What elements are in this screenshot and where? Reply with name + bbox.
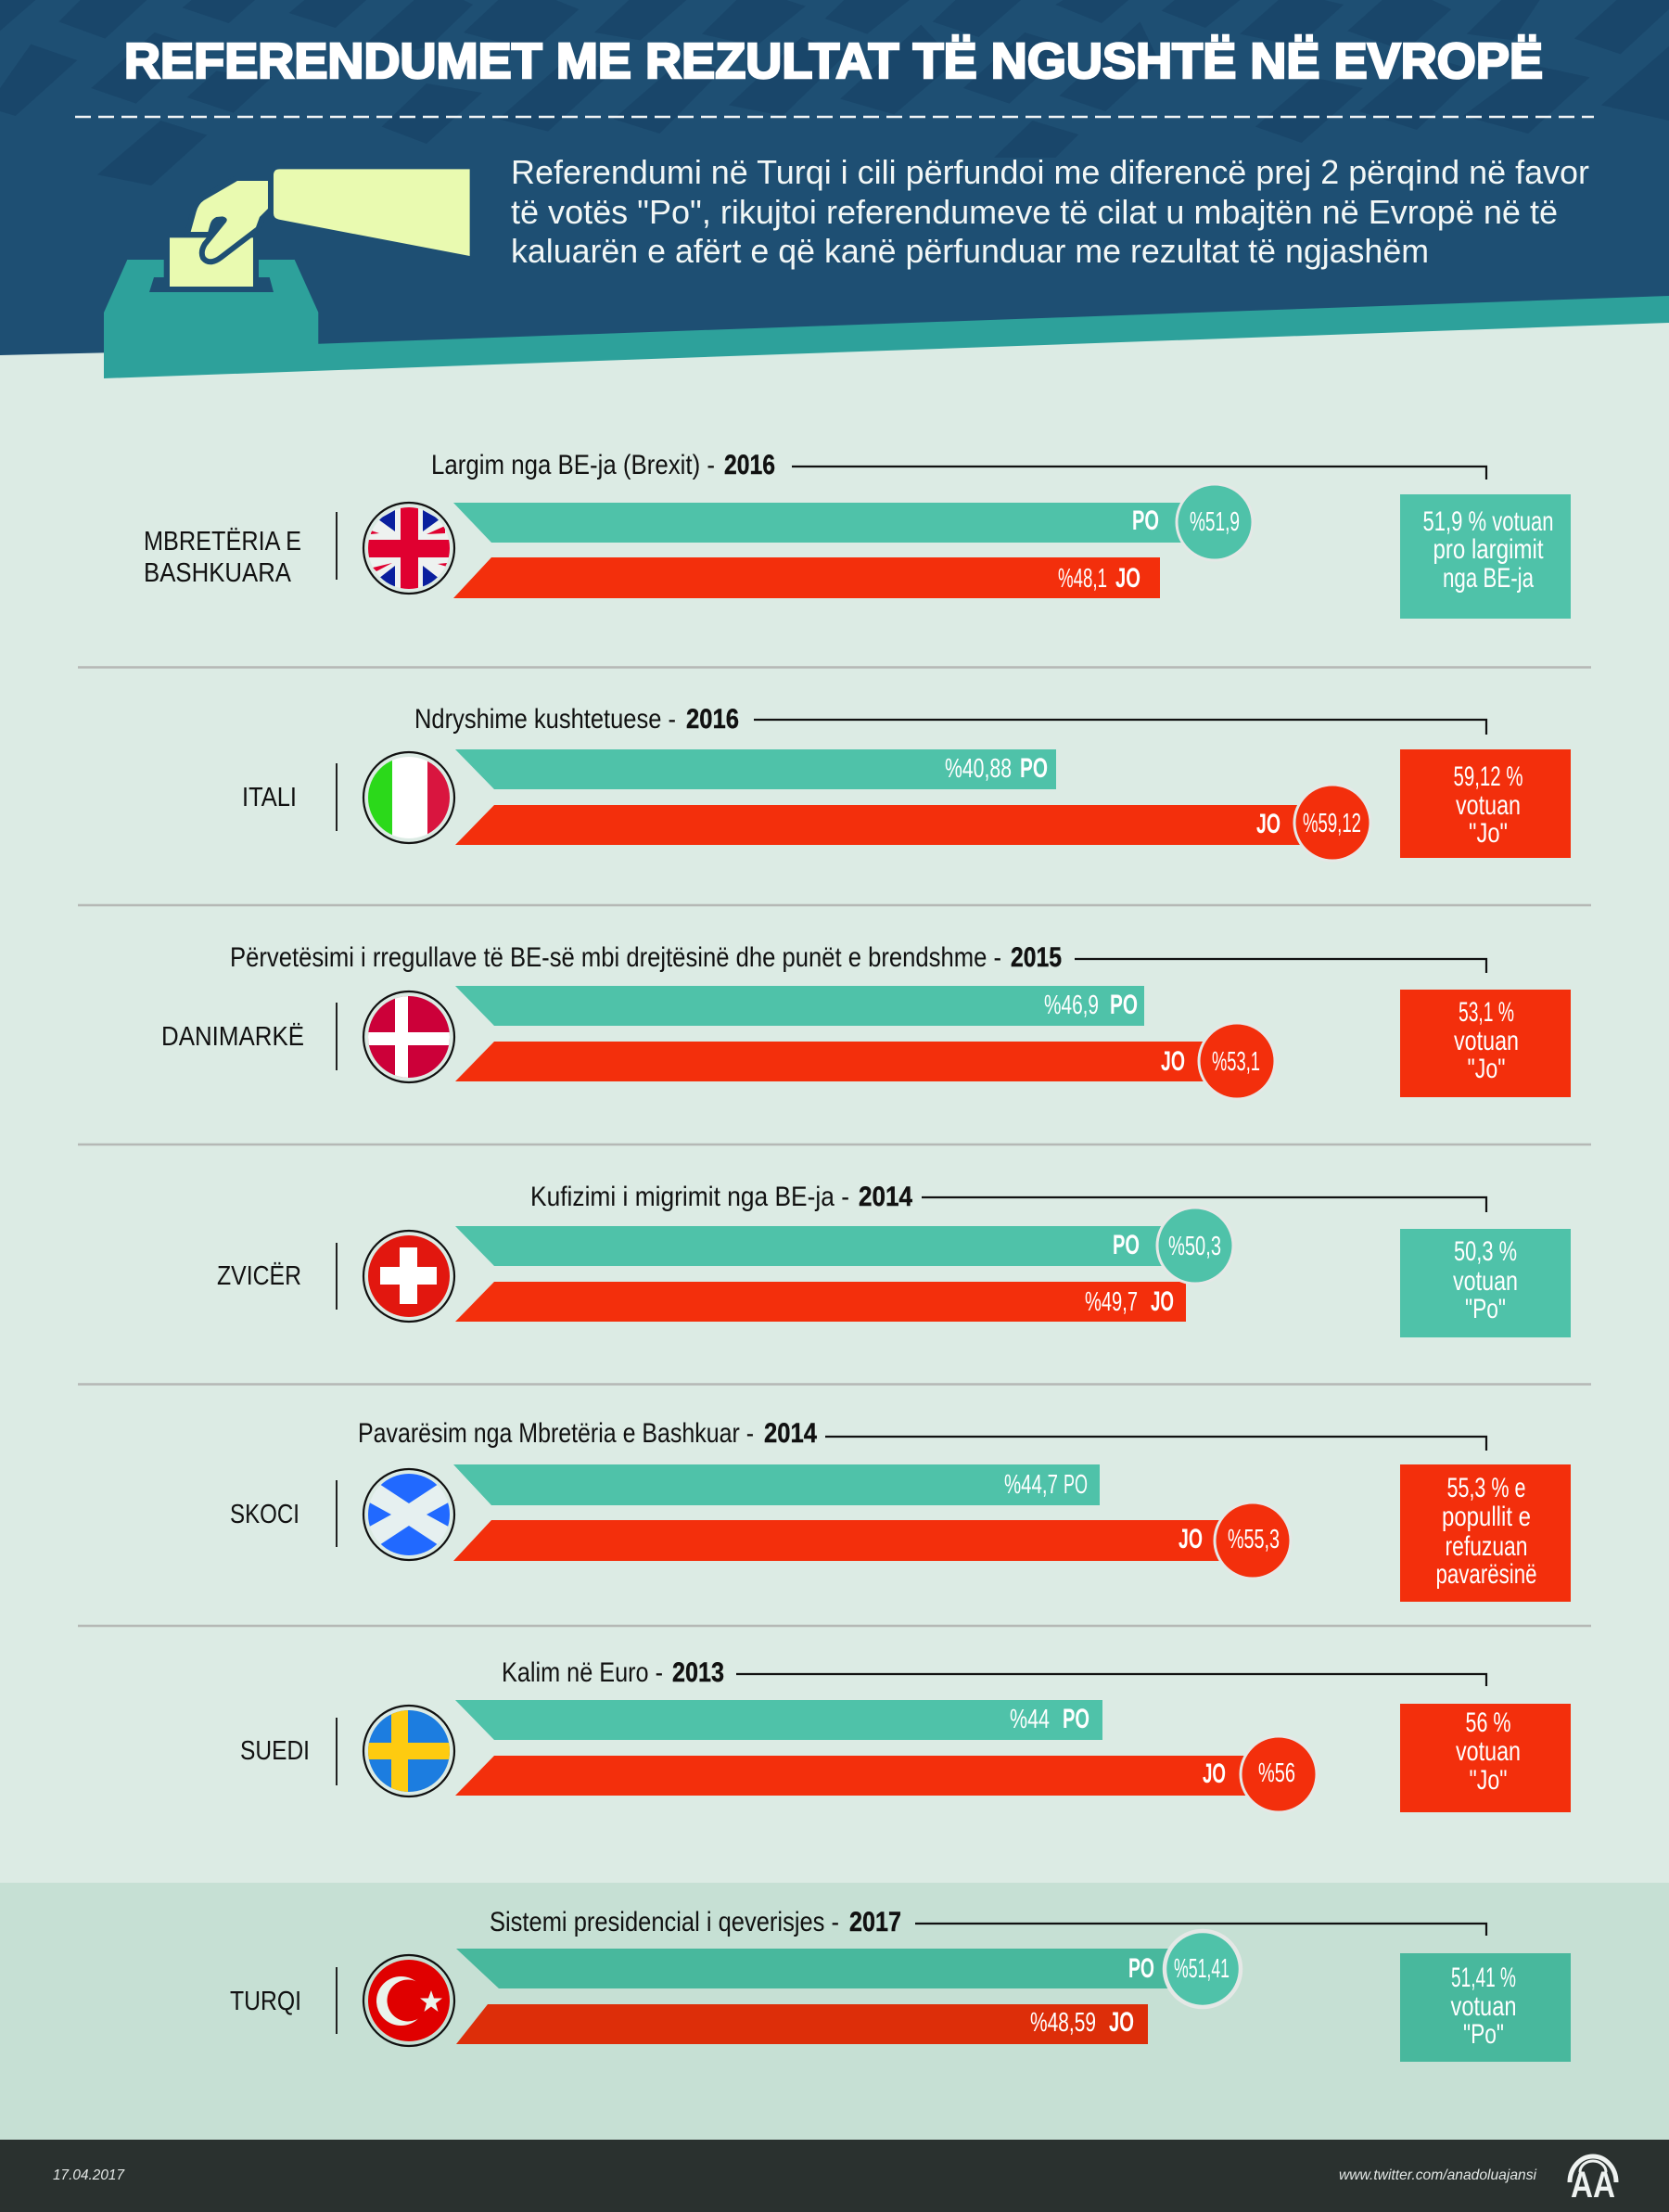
panel: Sweden xyxy=(240,1657,1571,1812)
bar labels: %55,3 xyxy=(1228,1525,1280,1554)
result box xyxy=(1400,1464,1571,1602)
bar labels: PO xyxy=(1064,1470,1088,1500)
bubble: winning share xyxy=(1177,484,1253,560)
result box: votuan xyxy=(1456,790,1521,821)
icon: Anadolu Agency logo: AA xyxy=(1571,2165,1615,2206)
panel: Denmark xyxy=(161,942,1571,1099)
result box: nga BE-ja xyxy=(1443,563,1534,594)
referendum heading: Largim nga BE-ja (Brexit) - xyxy=(431,450,715,480)
bar labels: %59,12 xyxy=(1303,809,1361,838)
bar labels: %56 xyxy=(1258,1758,1295,1788)
result box: "Jo" xyxy=(1467,1054,1506,1084)
referendum heading: Sistemi presidencial i qeverisjes - xyxy=(490,1907,839,1937)
country name: SKOCI xyxy=(230,1500,299,1529)
bar labels: JO xyxy=(1178,1524,1203,1554)
bar labels xyxy=(1030,1953,1229,2038)
date: 17.04.2017 xyxy=(53,2167,125,2183)
panel: header background xyxy=(0,0,1669,355)
bar labels: %50,3 xyxy=(1168,1232,1221,1261)
country name: TURQI xyxy=(230,1987,301,2016)
bar labels: JO xyxy=(1203,1758,1226,1789)
bar: PO xyxy=(456,1949,1203,1988)
result box: 56 % xyxy=(1465,1707,1511,1738)
bar: JO xyxy=(453,1520,1253,1561)
result box: 50,3 % xyxy=(1454,1236,1517,1267)
referendum heading: 2016 xyxy=(686,704,739,735)
result box: 51,9 % votuan xyxy=(1422,506,1554,537)
referendum heading: Ndryshime kushtetuese - xyxy=(414,704,676,735)
bar: PO xyxy=(453,1464,1100,1505)
result box: popullit e xyxy=(1442,1502,1531,1532)
bar: PO xyxy=(455,749,1056,789)
result box: "Po" xyxy=(1463,2019,1504,2050)
result box: votuan xyxy=(1454,1026,1519,1056)
result box xyxy=(1400,1953,1571,2062)
bar labels: %46,9 xyxy=(1044,991,1099,1020)
intro text: kaluarën e afërt e që kanë përfunduar me rezultat të ngjashëm xyxy=(511,232,1429,270)
bar labels: %51,9 xyxy=(1190,507,1240,537)
intro text: të votës "Po", rikujtoi referendumeve të cilat u mbajtën në Evropë në të xyxy=(511,193,1558,231)
bar labels: JO xyxy=(1161,1046,1185,1077)
result box: 59,12 % xyxy=(1454,761,1522,792)
icon: UK flag xyxy=(363,502,455,595)
bar: PO xyxy=(455,1700,1102,1740)
bar labels: PO xyxy=(1110,990,1138,1020)
bar labels: PO xyxy=(1063,1704,1089,1734)
result box: votuan xyxy=(1456,1736,1521,1767)
bubble: winning share xyxy=(1294,785,1370,861)
referendum heading: Kalim në Euro - xyxy=(502,1657,663,1688)
bubble: winning share xyxy=(1157,1208,1233,1284)
bar: JO xyxy=(453,557,1160,598)
bar labels: %51,41 xyxy=(1174,1954,1229,1984)
bar labels: JO xyxy=(1256,809,1280,839)
bar: PO xyxy=(453,503,1215,543)
icon: Italy flag xyxy=(363,751,455,844)
result box: 55,3 % e xyxy=(1446,1473,1526,1503)
referendum heading: 2014 xyxy=(764,1418,817,1449)
bar labels xyxy=(1085,1230,1221,1317)
bar labels: %53,1 xyxy=(1212,1047,1260,1077)
panel: Scotland xyxy=(230,1418,1571,1602)
bar labels xyxy=(1044,990,1260,1077)
country name: BASHKUARA xyxy=(144,558,292,588)
result box: pro largimit xyxy=(1433,534,1544,565)
result box: votuan xyxy=(1450,1991,1517,2022)
bar: JO xyxy=(455,805,1332,845)
country name: DANIMARKË xyxy=(161,1022,304,1052)
referendum heading: Kufizimi i migrimit nga BE-ja - xyxy=(530,1182,849,1212)
country name: MBRETËRIA E xyxy=(144,527,301,556)
bar labels xyxy=(1058,505,1240,594)
bar: JO xyxy=(455,1282,1186,1322)
result box: "Jo" xyxy=(1469,818,1508,849)
referendum heading: 2013 xyxy=(672,1657,724,1688)
result box: "Po" xyxy=(1465,1294,1506,1324)
bubble: winning share xyxy=(1165,1931,1241,2007)
bar labels: %49,7 xyxy=(1085,1287,1138,1317)
icon: Sweden flag xyxy=(363,1705,455,1797)
bar labels: PO xyxy=(1128,1953,1154,1984)
bar labels: PO xyxy=(1113,1230,1140,1260)
icon: hand casting a vote in a ballot box xyxy=(104,169,1669,378)
icon: Denmark flag xyxy=(363,991,455,1083)
result box xyxy=(1400,990,1571,1097)
bar labels xyxy=(1004,1470,1280,1554)
country name: ITALI xyxy=(242,783,297,812)
intro text: Referendumi në Turqi i cili përfundoi me diferencë prej 2 përqind në favor xyxy=(511,153,1589,191)
footer xyxy=(0,2140,1669,2212)
bar labels xyxy=(1010,1704,1295,1789)
source link: www.twitter.com/anadoluajansi xyxy=(1339,2167,1536,2183)
result box: pavarësinë xyxy=(1435,1559,1537,1590)
title: REFERENDUMET ME REZULTAT TË NGUSHTË NË EVROPË xyxy=(124,33,1543,89)
icon: Turkey flag xyxy=(363,1954,455,2047)
result box xyxy=(1400,1229,1571,1337)
bubble: winning share xyxy=(1199,1023,1275,1099)
country name: ZVICËR xyxy=(217,1261,301,1291)
bar labels: PO xyxy=(1020,753,1048,784)
panel: Switzerland xyxy=(217,1182,1571,1337)
country name xyxy=(144,527,301,588)
bar: PO xyxy=(455,986,1144,1026)
result box xyxy=(1400,1704,1571,1812)
referendum heading: Pavarësim nga Mbretëria e Bashkuar - xyxy=(358,1418,754,1449)
result box: votuan xyxy=(1453,1266,1518,1297)
referendum heading: 2017 xyxy=(849,1907,901,1937)
bar labels: JO xyxy=(1109,2007,1134,2038)
panel: Turkey xyxy=(230,1907,1571,2062)
referendum heading: 2014 xyxy=(859,1182,912,1212)
bar labels: PO xyxy=(1132,505,1159,536)
referendum heading: Përvetësimi i rregullave të BE-së mbi drejtësinë dhe punët e brendshme - xyxy=(230,942,1001,973)
referendum heading: 2015 xyxy=(1011,942,1062,973)
panel: United Kingdom xyxy=(144,450,1571,619)
bar: PO xyxy=(455,1226,1195,1266)
bar labels: JO xyxy=(1151,1286,1174,1317)
bar labels xyxy=(945,753,1361,839)
bar: JO xyxy=(455,1042,1237,1081)
bar labels: %44,7 xyxy=(1004,1470,1058,1500)
result box: 53,1 % xyxy=(1459,997,1514,1028)
icon: Scotland flag xyxy=(363,1468,455,1561)
bubble: winning share xyxy=(1241,1736,1317,1812)
bar labels: %48,1 xyxy=(1058,564,1107,594)
icon: Switzerland flag xyxy=(363,1230,455,1323)
result box xyxy=(1400,749,1571,858)
country name: SUEDI xyxy=(240,1736,310,1766)
bar: JO xyxy=(455,1756,1279,1796)
bar: JO xyxy=(456,2004,1148,2044)
result box xyxy=(1400,494,1571,619)
bar labels: %48,59 xyxy=(1030,2008,1096,2038)
bubble: winning share xyxy=(1215,1502,1291,1579)
intro text xyxy=(511,153,1589,270)
referendum heading: 2016 xyxy=(724,450,775,480)
bar labels: JO xyxy=(1115,563,1140,594)
panel: Italy xyxy=(242,704,1571,861)
bar labels: %44 xyxy=(1010,1705,1050,1734)
result box: refuzuan xyxy=(1445,1531,1528,1562)
bar labels: %40,88 xyxy=(945,754,1012,784)
result box: 51,41 % xyxy=(1451,1963,1516,1993)
panel: Turkey highlight band xyxy=(0,1883,1669,2140)
result box: "Jo" xyxy=(1469,1765,1508,1796)
